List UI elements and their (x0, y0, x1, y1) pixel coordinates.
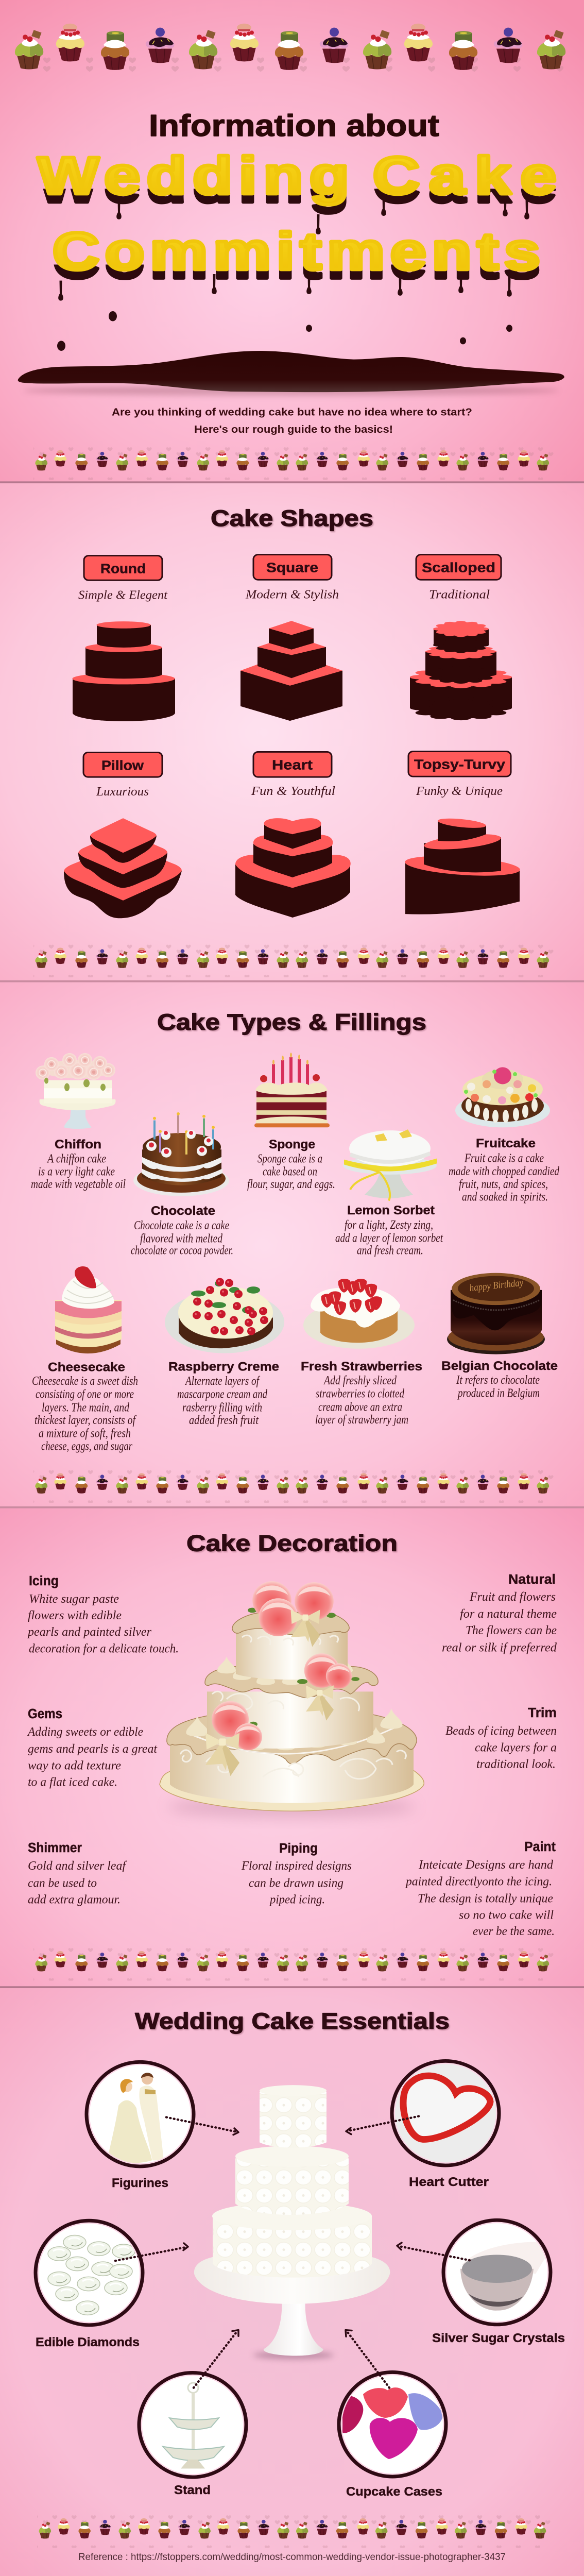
text block: Piping: can be drawn using (249, 1876, 343, 1890)
item: Heart Cutter: Heart Cutter (409, 2175, 489, 2189)
text block: Lemon Sorbet: and fresh cream. (357, 1244, 423, 1258)
item: Figurines (87, 2062, 194, 2190)
item: Heart Cutter (392, 2061, 499, 2189)
shape: Heart: Heart (272, 757, 313, 772)
shape: Pillow: Pillow (101, 758, 144, 773)
cake image: fruitcake (455, 1067, 550, 1127)
text block: Cheesecake: Cheesecake (48, 1361, 125, 1375)
panel: cake types and fillings (0, 982, 584, 1509)
text block: Chiffon: Chiffon (55, 1138, 101, 1151)
text block: Raspberry Creme: added fresh fruit (189, 1413, 259, 1427)
illustration: three tier wedding cake (160, 1581, 424, 1818)
cake image: belgian chocolate (447, 1273, 545, 1354)
text block: Trim: cake layers for a (475, 1741, 557, 1754)
text block: Paint: The design is totally unique (418, 1892, 553, 1905)
text block: Piping: Piping (279, 1840, 318, 1856)
text block: Belgian Chocolate (441, 1359, 558, 1400)
heading: Cake Types & Fillings: Cake Types & Fillings (157, 1009, 426, 1035)
text block: Gems: Gems (28, 1706, 62, 1721)
cake image: sponge (254, 1053, 330, 1127)
text block: Raspberry Creme: rasberry filling with (182, 1401, 262, 1415)
item: Cupcake Cases (339, 2372, 446, 2499)
text block: Cheesecake: thickest layer, consists of (35, 1413, 137, 1427)
text block: Natural: Fruit and flowers (469, 1590, 556, 1604)
text block: Belgian Chocolate: It refers to chocolate (456, 1373, 540, 1387)
text block: Fruitcake: fruit, nuts, and spices, (459, 1177, 548, 1191)
text block: Chiffon (31, 1138, 126, 1191)
text block: Shimmer (28, 1840, 127, 1906)
text block: Paint: so no two cake will (459, 1908, 554, 1922)
shape: Topsy-Turvy: Topsy-Turvy (414, 757, 505, 772)
text block: Sponge: Sponge cake is a (257, 1152, 322, 1165)
text block: Gems: gems and pearls is a great (28, 1742, 158, 1756)
text block: Chocolate: Chocolate (151, 1204, 215, 1218)
text block: Lemon Sorbet (335, 1204, 443, 1258)
intro text: Are you thinking of wedding cake but have no idea where to start? (112, 406, 472, 418)
text block: Chocolate: Chocolate cake is a cake (134, 1218, 229, 1232)
text block: Chocolate (131, 1204, 233, 1258)
decorative cupcake row (10, 21, 577, 87)
cake image: chocolate (133, 1112, 229, 1196)
heading: Information about: Information about (149, 108, 439, 143)
text block: Icing: decoration for a delicate touch. (29, 1642, 179, 1655)
item: Edible Diamonds: Edible Diamonds (36, 2335, 140, 2349)
text block: Raspberry Creme: Raspberry Creme (168, 1360, 279, 1374)
text block: Paint: ever be the same. (473, 1924, 555, 1938)
text block: Fresh Strawberries (301, 1360, 422, 1427)
text block: Natural: for a natural theme (460, 1607, 557, 1621)
text block: Fresh Strawberries: layer of strawberry jam (315, 1413, 408, 1427)
text block: Gems: Adding sweets or edible (27, 1725, 143, 1739)
item: Stand (139, 2372, 246, 2497)
cupcake strip (33, 1469, 554, 1503)
text block: Chiffon: made with vegetable oil (31, 1177, 126, 1191)
text block: Raspberry Creme: mascarpone cream and (177, 1387, 268, 1401)
text block: Shimmer: Gold and silver leaf (28, 1859, 127, 1873)
text block: Chiffon: A chiffon cake (46, 1152, 106, 1165)
cupcake strip (33, 446, 554, 480)
text block: Fresh Strawberries: strawberries to clotted (316, 1387, 405, 1400)
text block: Fresh Strawberries: Fresh Strawberries (301, 1360, 422, 1374)
item: Cupcake Cases: Cupcake Cases (346, 2485, 442, 2499)
intro text (112, 406, 472, 435)
text block: Chocolate: flavored with melted (140, 1232, 223, 1245)
text block: Icing: Icing (29, 1573, 59, 1588)
text block: Piping: piped icing. (269, 1893, 325, 1906)
text block: Lemon Sorbet: Lemon Sorbet (347, 1204, 435, 1217)
panel: header (0, 0, 584, 483)
text block: Shimmer: can be used to (28, 1876, 97, 1890)
text block: Sponge: cake based on (263, 1165, 317, 1179)
text block: Chiffon: is a very light cake (38, 1165, 115, 1179)
cake image: cheesecake (55, 1266, 122, 1353)
shape: Square: Square (266, 560, 318, 575)
heading: Cake Shapes: Cake Shapes (211, 505, 373, 531)
text block: Fresh Strawberries: Add freshly sliced (323, 1374, 397, 1387)
text block: Natural: real or silk if preferred (442, 1641, 557, 1654)
panel: cake shapes (0, 483, 584, 982)
shape: Pillow (64, 752, 182, 918)
heading: Wedding Cake Essentials: Wedding Cake Essentials (135, 2008, 450, 2034)
text block: Belgian Chocolate: Belgian Chocolate (441, 1359, 558, 1373)
item: Silver Sugar Crystals: Silver Sugar Crystals (432, 2331, 565, 2345)
chocolate drops (57, 311, 512, 351)
arrows: dotted connectors from items to cake (115, 2116, 470, 2388)
shape: Heart (235, 752, 351, 918)
text block: Paint: painted directlyonto the icing. (405, 1875, 552, 1888)
shape: Square (241, 555, 342, 721)
shape: Round: Round (100, 561, 146, 577)
text block: Trim: traditional look. (476, 1757, 556, 1771)
text block: Fruitcake: and soaked in spirits. (462, 1190, 548, 1204)
text block: Sponge: flour, sugar, and eggs. (247, 1177, 335, 1191)
text block: Cheesecake (32, 1361, 138, 1453)
text block: Cheesecake: consisting of one or more (36, 1387, 134, 1401)
text block: Trim (445, 1705, 557, 1771)
text block: Raspberry Creme (168, 1360, 279, 1427)
text block: Icing: flowers with edible (28, 1608, 122, 1622)
item: Silver Sugar Crystals (432, 2220, 565, 2345)
text block: Fruitcake: Fruit cake is a cake (464, 1151, 544, 1165)
title line: Wedding Cake (38, 146, 556, 234)
text block: Cheesecake: cheese, eggs, and sugar (41, 1439, 132, 1453)
text block: Fruitcake (449, 1137, 560, 1204)
cake image: raspberry creme (165, 1278, 284, 1353)
illustration: white lace wedding cake on stand (194, 2085, 390, 2359)
text block: Cheesecake: Cheesecake is a sweet dish (32, 1374, 138, 1388)
cake image: lemon sorbet (343, 1129, 437, 1200)
cupcake strip (33, 1946, 554, 1981)
shape: Topsy-Turvy: Funky & Unique (416, 785, 503, 798)
cake image: chiffon (36, 1053, 115, 1129)
shape: Square: Modern & Stylish (245, 588, 339, 601)
text block: Lemon Sorbet: add a layer of lemon sorbet (335, 1231, 443, 1245)
shape: Pillow: Luxurious (96, 785, 149, 799)
chocolate puddle (18, 351, 564, 396)
text block: Gems: to a flat iced cake. (28, 1775, 117, 1789)
shape: Scalloped: Traditional (429, 588, 490, 601)
text block: Chocolate: chocolate or cocoa powder. (131, 1244, 233, 1258)
text block: Trim: Trim (528, 1705, 557, 1720)
cupcake strip (37, 2514, 551, 2548)
title line: Wedding Cake: Wedding (38, 146, 349, 205)
text block: Fruitcake: Fruitcake (476, 1137, 536, 1150)
text block: Belgian Chocolate: produced in Belgium (457, 1386, 540, 1400)
heading: Cake Decoration: Cake Decoration (186, 1530, 398, 1556)
text block: Gems (27, 1706, 158, 1789)
reference line: Reference : https://fstoppers.com/wedding/most-common-wedding-vendor-issue-photographer-3437 (78, 2551, 506, 2563)
item: Edible Diamonds (36, 2221, 143, 2349)
shape: Topsy-Turvy (404, 751, 521, 914)
cupcake strip (33, 943, 554, 977)
intro text: Here's our rough guide to the basics! (194, 423, 393, 435)
text block: Lemon Sorbet: for a light, Zesty zing, (345, 1218, 433, 1232)
panel: cake decoration (0, 1509, 584, 1988)
title line: Commitments: Commitments (53, 222, 540, 281)
text block: Sponge (247, 1138, 335, 1191)
text block: Trim: Beads of icing between (445, 1724, 557, 1738)
text block: Natural: Natural (508, 1571, 556, 1587)
text block: Raspberry Creme: Alternate layers of (184, 1374, 260, 1388)
text block: Icing (27, 1573, 179, 1655)
text block: Natural (442, 1571, 557, 1654)
cake image: belgian chocolate: happy Birthday (469, 1277, 524, 1294)
title line: Wedding Cake: Cake (373, 146, 556, 205)
text block: Sponge: Sponge (269, 1138, 315, 1151)
panel: wedding cake essentials (0, 1988, 584, 2576)
shape: Scalloped: Scalloped (422, 560, 495, 575)
text block: Shimmer: add extra glamour. (28, 1893, 121, 1906)
text block: Piping (241, 1840, 352, 1906)
text block: Icing: White sugar paste (29, 1592, 119, 1606)
text block: Paint: Paint (524, 1839, 556, 1854)
text block: Gems: way to add texture (28, 1759, 121, 1772)
text block: Paint: Inteicate Designs are hand (418, 1858, 554, 1872)
text block: Shimmer: Shimmer (28, 1840, 82, 1855)
shape: Round: Simple & Elegent (78, 588, 168, 602)
text block: Cheesecake: a mixture of soft, fresh (39, 1427, 131, 1440)
cake image: fresh strawberries (303, 1279, 415, 1349)
text block: Natural: The flowers can be (466, 1624, 557, 1637)
shape: Heart: Fun & Youthful (251, 785, 335, 798)
shape: Round (72, 556, 175, 721)
item: Stand: Stand (174, 2483, 211, 2497)
text block: Cheesecake: layers. The main, and (42, 1401, 130, 1415)
item: Figurines: Figurines (112, 2176, 168, 2190)
text block: Icing: pearls and painted silver (27, 1625, 151, 1639)
shape: Scalloped (410, 555, 512, 720)
text block: Piping: Floral inspired designs (241, 1859, 352, 1873)
text block: Paint (405, 1839, 556, 1938)
text block: Fresh Strawberries: cream above an extra (318, 1400, 402, 1414)
